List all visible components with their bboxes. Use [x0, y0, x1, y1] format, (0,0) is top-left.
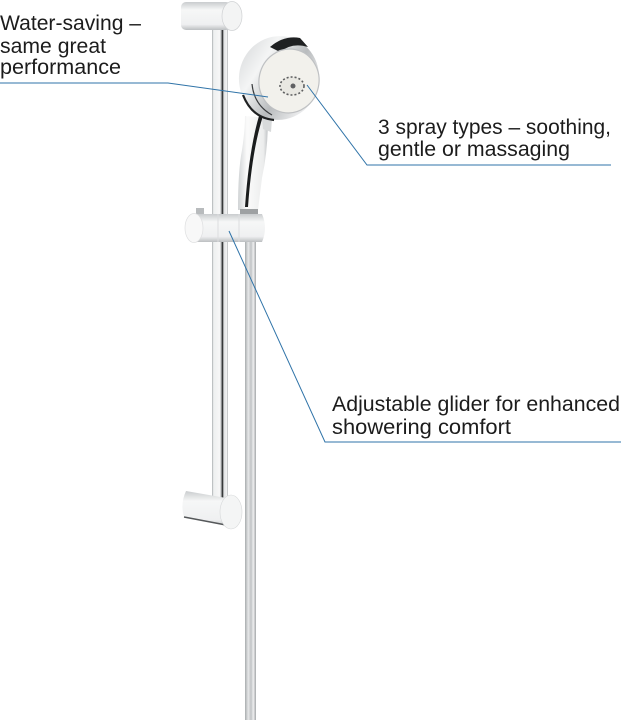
hand shower head: [231, 29, 327, 127]
callout: spray types: 3 spray types – soothing,: [378, 116, 611, 139]
callout: spray types: [307, 85, 611, 165]
spray nozzle centre: [280, 77, 304, 95]
callout: water-saving: [0, 12, 268, 97]
flexible hose: [245, 240, 256, 720]
callout: spray types: gentle or massaging: [378, 138, 570, 161]
hand shower handle: [238, 116, 272, 210]
callout: water-saving: Water-saving –: [0, 12, 141, 35]
top wall bracket: [181, 2, 242, 30]
callout: water-saving: same great: [0, 35, 106, 58]
shower rail: [212, 20, 228, 500]
callout: adjustable glider: showering comfort: [332, 416, 511, 439]
callout: adjustable glider: [229, 231, 621, 442]
bottom wall bracket: [182, 491, 242, 529]
callout: water-saving: performance: [0, 56, 121, 79]
adjustable glider: [185, 208, 265, 242]
callout: adjustable glider: Adjustable glider for enhanced: [332, 393, 620, 416]
